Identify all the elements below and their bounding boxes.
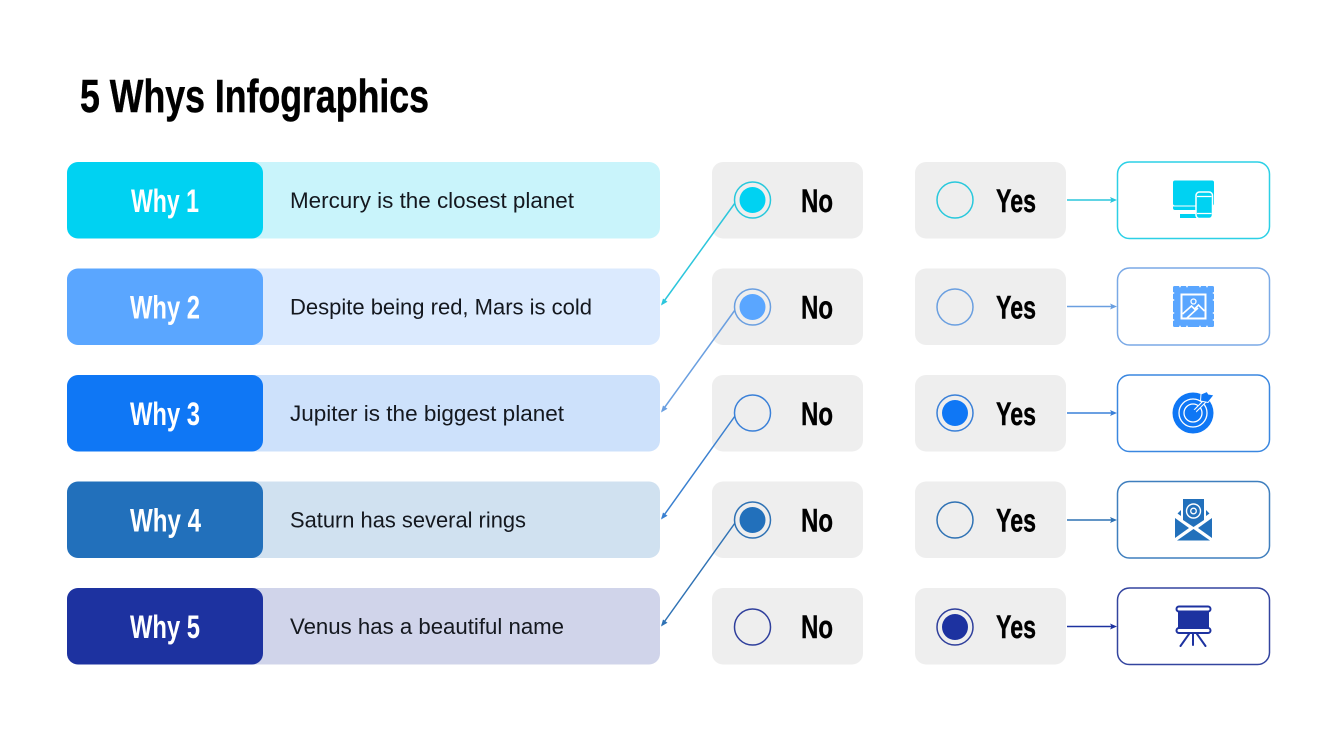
panel: No answers — [712, 162, 863, 664]
panel: row 3 why: Why 3 — [130, 396, 200, 432]
radio buttons: No column — [734, 182, 770, 645]
panel: row 4 why: Why 4 — [130, 502, 201, 538]
panel: row 1 why — [67, 162, 660, 238]
icon: picture stamp — [1173, 286, 1214, 327]
panel: row 2 why: Despite being red, Mars is cold — [290, 294, 592, 320]
panel: Yes answers: Yes — [996, 502, 1036, 538]
panel: icon box 4 — [1118, 482, 1270, 558]
panel: row 4 why — [67, 482, 660, 558]
icon: devices — [1173, 180, 1214, 218]
panel: icon box 3 — [1118, 375, 1270, 452]
panel: row 3 why: Jupiter is the biggest planet — [290, 401, 564, 426]
panel: row 4 why: Saturn has several rings — [290, 508, 526, 532]
radio buttons: Yes column — [937, 182, 973, 645]
panel: No answers: No — [801, 609, 833, 645]
panel: row 1 why: Why 1 — [131, 183, 199, 219]
arrow: Yes 1 to icon — [1067, 197, 1117, 203]
panel: Yes answers: Yes — [996, 183, 1036, 219]
panel: No answers: No — [801, 290, 833, 326]
arrow: Yes 4 to icon — [1067, 517, 1117, 523]
panel: row 5 why: Why 5 — [130, 609, 200, 645]
panel: No answers: No — [801, 183, 833, 219]
icon: envelope with at sign — [1175, 499, 1212, 540]
arrow: Yes 5 to icon — [1067, 624, 1117, 630]
arrow: Yes 3 to icon — [1067, 410, 1117, 416]
panel: row 2 why — [67, 268, 660, 345]
icon: target — [1172, 392, 1214, 434]
panel: icon box 1 — [1118, 162, 1270, 238]
panel: No answers: No — [801, 396, 833, 432]
panel: row 1 why: Mercury is the closest planet — [290, 188, 574, 213]
panel: row 2 why: Why 2 — [130, 290, 200, 326]
panel: Yes answers: Yes — [996, 396, 1036, 432]
arrow: No 1 to Why 2 — [661, 203, 735, 306]
icon: presentation board — [1176, 606, 1210, 646]
arrow: Yes 2 to icon — [1067, 304, 1117, 310]
panel: row 5 why: Venus has a beautiful name — [290, 614, 564, 639]
panel: row 5 why — [67, 588, 660, 664]
title: 5 Whys Infographics — [80, 70, 429, 122]
panel: Yes answers — [915, 162, 1066, 664]
panel: icon box 2 — [1118, 268, 1270, 345]
panel: Yes answers: Yes — [996, 290, 1036, 326]
panel: Yes answers: Yes — [996, 609, 1036, 645]
arrow: No 2 to Why 3 — [661, 310, 735, 412]
arrow: No 3 to Why 4 — [661, 416, 735, 520]
panel: row 3 why — [67, 375, 660, 452]
arrow: No 4 to Why 5 — [661, 523, 735, 626]
panel: icon box 5 — [1118, 588, 1270, 664]
panel: No answers: No — [801, 502, 833, 538]
